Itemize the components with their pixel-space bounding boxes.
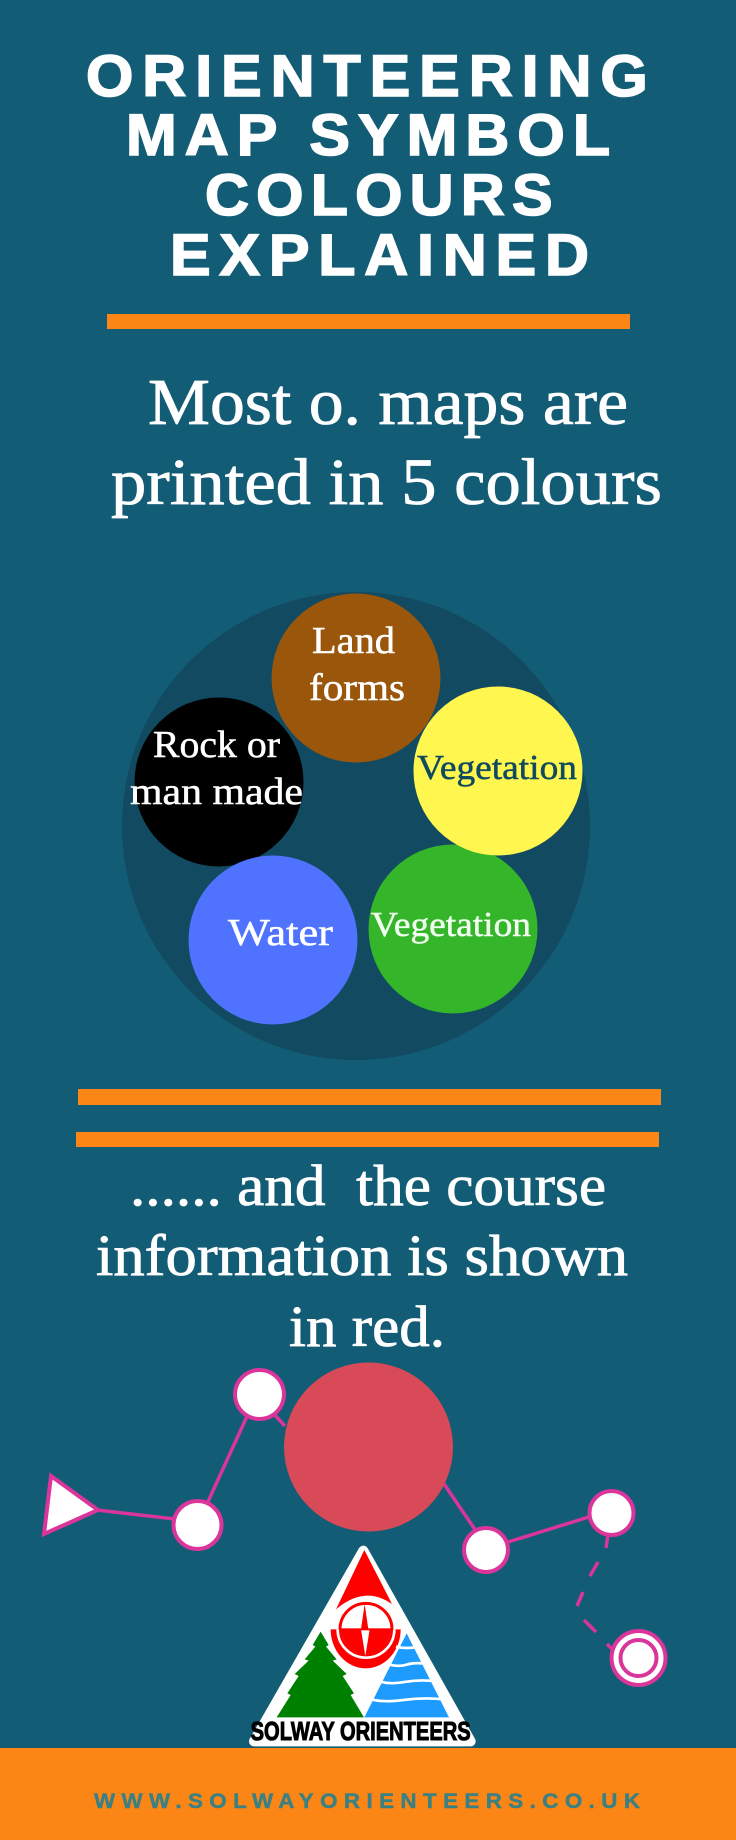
white triangle badge bbox=[254, 1551, 471, 1741]
subtitle: most maps printed in 5 colours: printed in 5 colours bbox=[111, 446, 662, 519]
Solway Orienteers logo bbox=[251, 1550, 471, 1746]
red compass bbox=[331, 1550, 401, 1668]
green circle: vegetation bbox=[368, 844, 538, 1014]
green tree bbox=[277, 1632, 364, 1717]
finish double circle bbox=[612, 1631, 666, 1685]
yellow circle: vegetation: Vegetation bbox=[417, 748, 577, 787]
orange divider upper bbox=[78, 1089, 661, 1105]
title: EXPLAINED bbox=[170, 222, 589, 288]
logo wordmark: SOLWAY ORIENTEERS bbox=[251, 1716, 471, 1746]
brown circle: land forms: forms bbox=[309, 667, 405, 709]
orange divider under title bbox=[107, 314, 630, 329]
website address: WWW.SOLWAYORIENTEERS.CO.UK bbox=[94, 1788, 640, 1813]
subtitle: most maps printed in 5 colours bbox=[111, 366, 662, 519]
subtitle: most maps printed in 5 colours: Most o. maps are bbox=[148, 366, 628, 439]
control circle 4 bbox=[590, 1491, 634, 1535]
orienteering course illustration bbox=[44, 1362, 666, 1685]
course information text bbox=[96, 1153, 628, 1359]
title: ORIENTEERING bbox=[86, 43, 648, 109]
course information text: information is shown bbox=[96, 1223, 628, 1288]
start triangle bbox=[44, 1476, 98, 1534]
blue circle: water: Water bbox=[228, 912, 333, 954]
title bbox=[86, 43, 648, 288]
colour circles diagram bbox=[122, 592, 590, 1060]
title: COLOURS bbox=[205, 162, 553, 228]
dark backing circle bbox=[122, 592, 590, 1060]
title: MAP SYMBOL bbox=[126, 102, 610, 168]
control circle 1 bbox=[174, 1501, 222, 1549]
orange divider lower bbox=[76, 1132, 659, 1147]
black circle: rock or man made: man made bbox=[130, 771, 303, 813]
footer band bbox=[0, 1748, 736, 1840]
green circle: vegetation: Vegetation bbox=[371, 905, 531, 944]
brown circle: land forms bbox=[272, 594, 440, 762]
black circle: rock or man made bbox=[130, 698, 304, 866]
red circle bbox=[284, 1362, 453, 1532]
course legs bbox=[97, 1412, 613, 1650]
course information text: ...... and the course bbox=[130, 1153, 606, 1218]
brown circle: land forms: Land bbox=[312, 620, 395, 662]
blue circle: water bbox=[188, 856, 358, 1024]
blue water triangle bbox=[364, 1633, 449, 1717]
yellow circle: vegetation bbox=[414, 686, 582, 856]
course information text: in red. bbox=[289, 1294, 445, 1359]
control circle 2 bbox=[235, 1370, 284, 1419]
black circle: rock or man made: Rock or bbox=[153, 724, 280, 766]
control circle 3 bbox=[464, 1528, 508, 1572]
